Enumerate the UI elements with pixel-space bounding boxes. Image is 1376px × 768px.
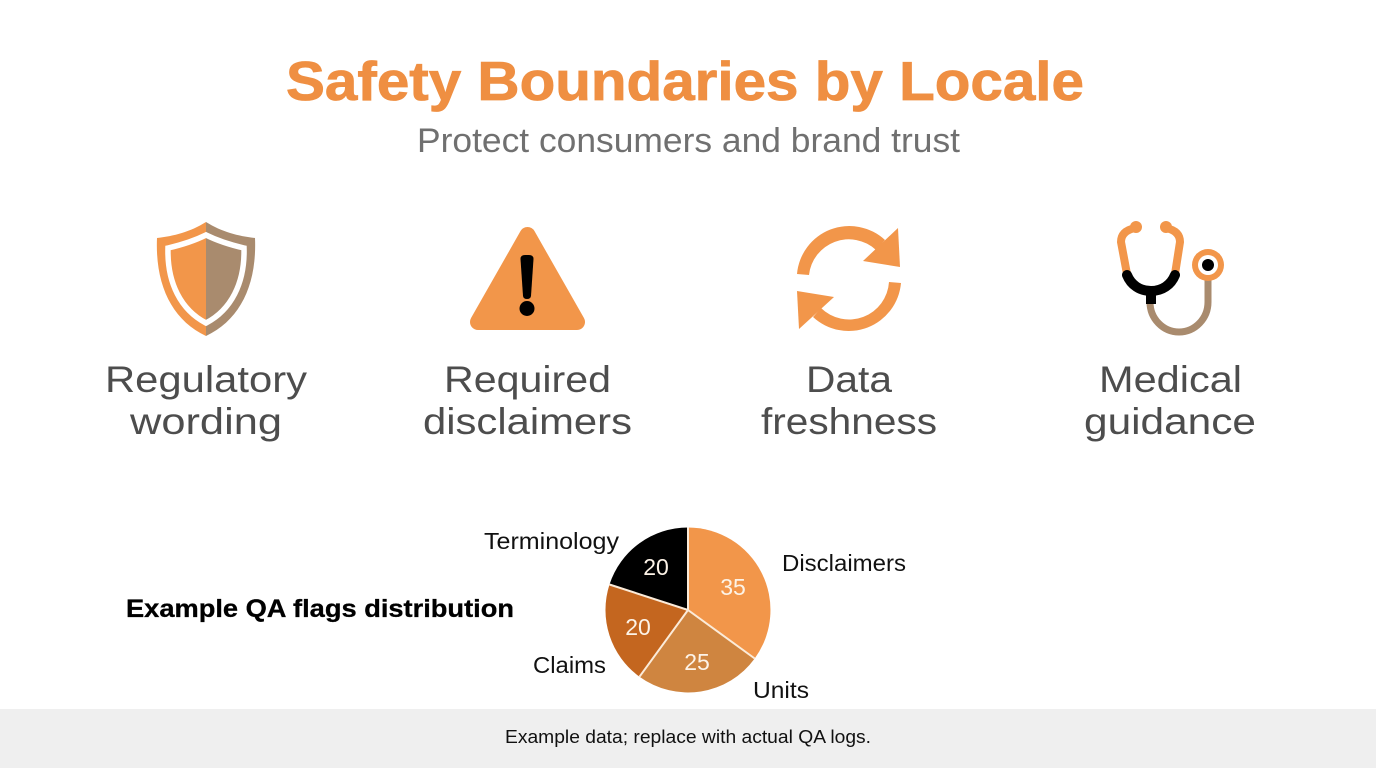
subtitle: Protect consumers and brand trust bbox=[417, 122, 961, 160]
label: regulatory wording bbox=[105, 358, 307, 442]
label: medical guidance: guidance bbox=[1084, 400, 1256, 442]
label: data freshness: Data bbox=[806, 358, 892, 400]
slice values: 20 bbox=[643, 554, 669, 580]
label: regulatory wording: Regulatory bbox=[105, 358, 307, 400]
category labels: Claims bbox=[533, 652, 606, 678]
category labels: Disclaimers bbox=[782, 550, 906, 576]
slice values: 35 bbox=[720, 574, 746, 600]
label: regulatory wording: wording bbox=[129, 400, 282, 442]
label: data freshness bbox=[761, 358, 937, 442]
slice values: 25 bbox=[684, 649, 710, 675]
label: data freshness: freshness bbox=[761, 400, 937, 442]
slice values: 20 bbox=[625, 614, 651, 640]
label: medical guidance bbox=[1084, 358, 1256, 442]
category labels bbox=[484, 528, 906, 703]
slice values bbox=[625, 554, 746, 675]
label: required disclaimers bbox=[423, 358, 632, 442]
chart heading: Example QA flags distribution bbox=[126, 595, 514, 623]
category labels: Units bbox=[753, 677, 809, 703]
icon: warning triangle bbox=[478, 235, 577, 322]
slice: claims 20 bbox=[605, 584, 688, 677]
title: Safety Boundaries by Locale bbox=[286, 50, 1084, 112]
label: required disclaimers: Required bbox=[444, 358, 611, 400]
category labels: Terminology bbox=[484, 528, 620, 554]
footer note: Example data; replace with actual QA logs. bbox=[505, 727, 871, 747]
icon: shield bbox=[157, 222, 255, 336]
footer bar bbox=[0, 709, 1376, 768]
icon: stethoscope bbox=[1121, 221, 1224, 332]
slice: terminology 20 bbox=[610, 528, 688, 610]
label: required disclaimers: disclaimers bbox=[423, 400, 632, 442]
slice: units 25 bbox=[640, 610, 755, 692]
slice: disclaimers 35 bbox=[688, 528, 770, 658]
label: medical guidance: Medical bbox=[1099, 358, 1242, 400]
icon: refresh arrows bbox=[797, 226, 901, 331]
pie chart bbox=[484, 528, 906, 703]
